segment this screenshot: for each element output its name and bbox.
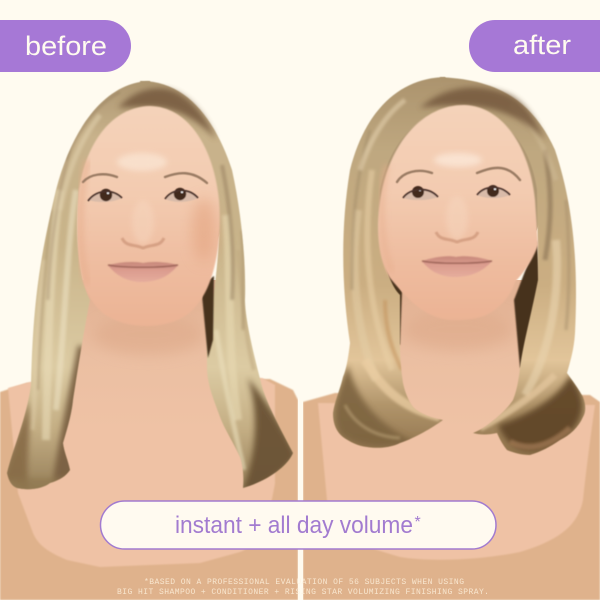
footnote line 2: BIG HIT SHAMPOO + CONDITIONER + RISING STAR VOLUMIZING FINISHING SPRAY. bbox=[117, 588, 489, 597]
after text: after bbox=[513, 30, 571, 60]
before: hair parting shadow bbox=[118, 88, 216, 140]
after: forehead highlight bbox=[434, 153, 482, 167]
after pill bbox=[469, 20, 600, 72]
after: right flip warm streaks bbox=[480, 375, 570, 447]
after: face bbox=[378, 105, 538, 320]
before: left eyebrow bbox=[83, 174, 117, 182]
after: left eye bbox=[403, 186, 438, 200]
portrait: before bbox=[0, 70, 300, 600]
after: hair right side bbox=[440, 76, 586, 456]
after: right eye bbox=[477, 185, 510, 198]
before: nose bbox=[122, 200, 164, 248]
after: left flip highlights bbox=[345, 360, 440, 438]
before: left eye bbox=[88, 189, 122, 202]
after: right flip dark ends bbox=[498, 375, 583, 451]
callout: instant + all day volume bbox=[100, 501, 496, 549]
before: right eye bbox=[165, 188, 198, 202]
before: forehead highlight bbox=[117, 153, 167, 171]
after: nose bbox=[436, 196, 478, 242]
before: left lock dark ends bbox=[7, 342, 82, 490]
center divider bbox=[298, 380, 303, 600]
callout asterisk: * bbox=[414, 514, 421, 531]
after: left flip dark ends bbox=[335, 365, 415, 447]
before text: before bbox=[25, 31, 107, 61]
before: hair behind face bbox=[72, 100, 224, 300]
footnote line 1: *BASED ON A PROFESSIONAL EVALUATION OF 56 SUBJECTS WHEN USING bbox=[144, 578, 464, 587]
before: hair left lock bbox=[6, 80, 150, 490]
before: neck shading bbox=[93, 315, 203, 355]
after: left eyebrow bbox=[397, 171, 432, 182]
after: face edge shading bbox=[382, 165, 392, 272]
before: tank top and shoulders bbox=[0, 379, 298, 600]
after: neck bbox=[365, 280, 550, 430]
before pill bbox=[0, 20, 131, 72]
before: mouth bbox=[108, 262, 178, 282]
before: right eyebrow bbox=[165, 173, 207, 183]
after: mouth bbox=[422, 256, 492, 277]
before: right lock dark ends bbox=[242, 378, 296, 492]
before: chest skin bbox=[8, 378, 275, 567]
after: chest skin bbox=[318, 403, 595, 560]
after: hair behind face bbox=[372, 90, 544, 290]
footnote bbox=[117, 578, 489, 597]
callout pill bbox=[100, 501, 496, 549]
after: neck shading bbox=[403, 310, 513, 350]
before: face bbox=[77, 106, 220, 326]
before: right cheek shading bbox=[192, 198, 216, 262]
after: right eyebrow bbox=[477, 168, 520, 180]
callout text: instant + all day volume bbox=[175, 512, 413, 539]
after: hair left side bbox=[332, 76, 446, 448]
after: tank top and shoulders bbox=[303, 393, 600, 600]
after label bbox=[469, 20, 600, 72]
after: hair parting shadow bbox=[420, 87, 545, 140]
before: hair right lock bbox=[140, 70, 300, 500]
before: face edge shading bbox=[80, 160, 88, 285]
portrait: after bbox=[303, 70, 600, 600]
before: neck bbox=[50, 280, 240, 430]
after: dark hair behind neck bbox=[378, 240, 545, 368]
before label bbox=[0, 20, 131, 72]
before: dark hair behind neck bbox=[201, 276, 214, 358]
